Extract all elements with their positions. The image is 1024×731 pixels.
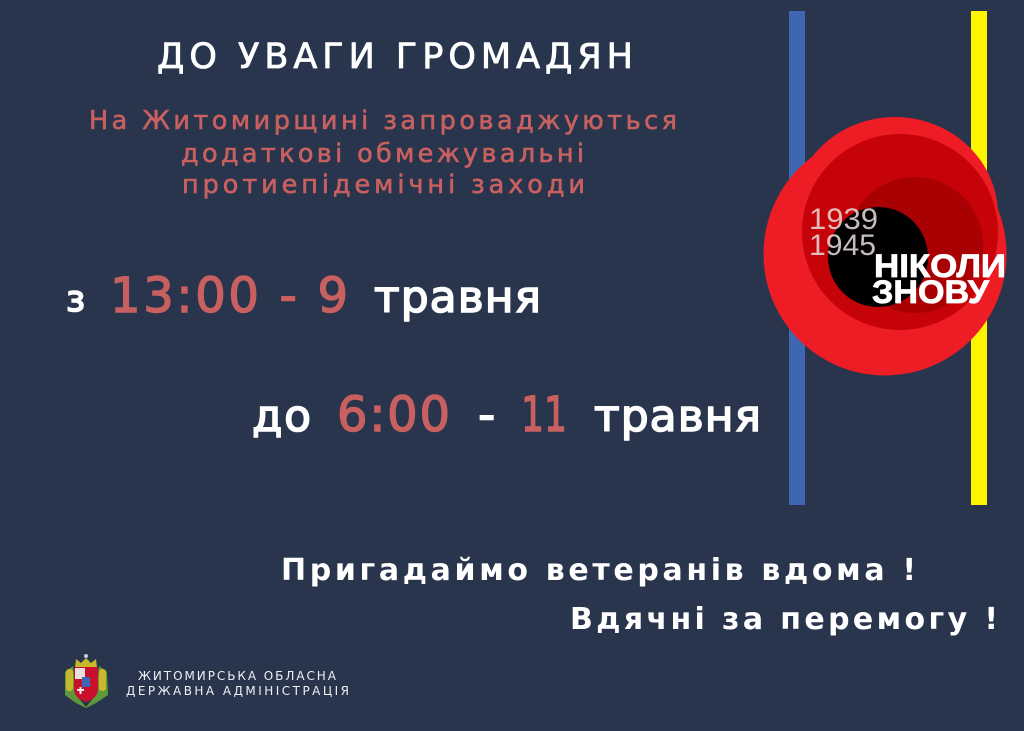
start date line: 13:00 - 9 [110, 268, 348, 324]
icon: poppy emblem [764, 117, 1006, 376]
end date line: 6:00 [337, 387, 450, 443]
administration name: ЖИТОМИРСЬКА ОБЛАСНА [138, 669, 337, 683]
end date line: до [252, 391, 311, 442]
icon: poppy emblem: 1945 [809, 229, 876, 262]
start date line: з [66, 279, 85, 320]
closing message [281, 553, 998, 637]
closing message: Пригадаймо ветеранів вдома ! [281, 553, 916, 588]
end date line: - [478, 387, 495, 443]
end date line [252, 387, 761, 443]
blue vertical stripe [789, 11, 805, 505]
subtitle text block: протиепідемічні заходи [182, 170, 585, 200]
end date line: 11 [521, 387, 567, 443]
yellow vertical stripe [971, 11, 987, 505]
emblem slogan: НІКОЛИ [874, 248, 1006, 284]
subtitle text block [89, 106, 677, 200]
title: ДО УВАГИ ГРОМАДЯН [157, 37, 633, 77]
end date line: травня [594, 391, 761, 442]
start date line [66, 268, 541, 324]
icon: poppy emblem: ЗНОВУ [872, 274, 990, 310]
administration name: ДЕРЖАВНА АДМІНІСТРАЦІЯ [126, 684, 349, 698]
icon: regional coat of arms [65, 654, 108, 708]
closing message: Вдячні за перемогу ! [570, 602, 998, 637]
emblem years: 1939 [809, 203, 878, 236]
start date line: травня [374, 272, 541, 323]
subtitle text block: На Житомирщині запроваджуються [89, 106, 677, 136]
administration name [126, 669, 349, 698]
subtitle text block: додаткові обмежувальні [181, 139, 584, 169]
